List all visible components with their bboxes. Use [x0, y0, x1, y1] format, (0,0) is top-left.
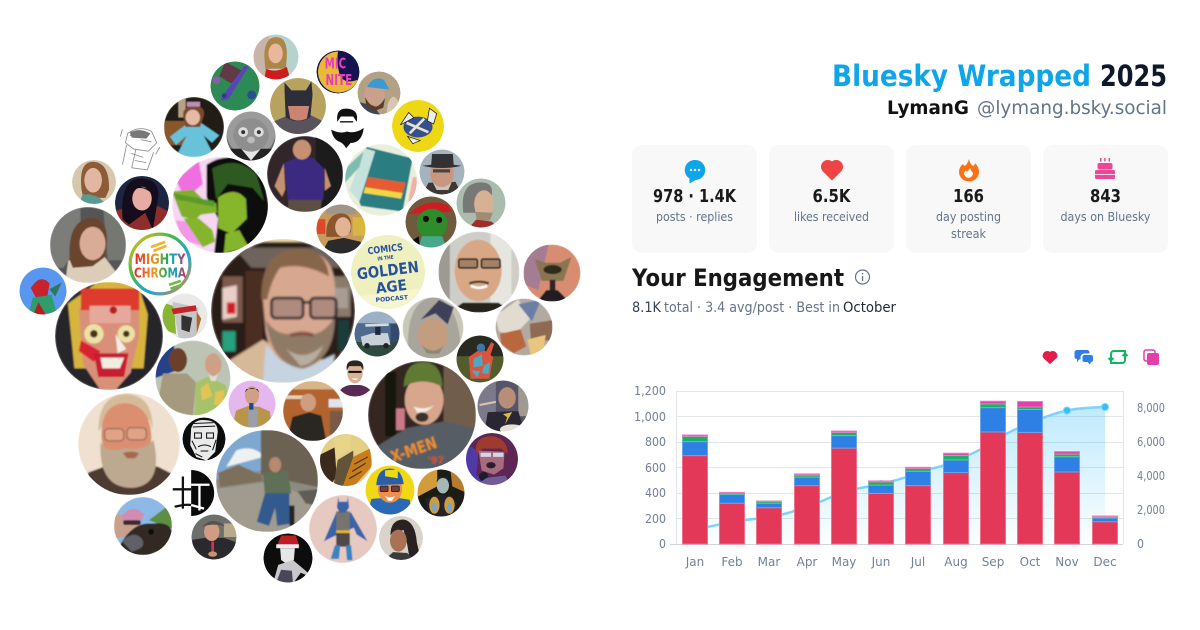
line markers	[878, 404, 1108, 488]
left axis labels: 200	[645, 512, 666, 526]
month labels: Sep	[982, 555, 1004, 569]
right axis labels	[1137, 401, 1165, 551]
avatar: Mighty Chroma logo: MIGHTY	[135, 252, 186, 268]
icon: heart	[822, 161, 842, 180]
quotes bars	[682, 401, 1118, 517]
avatar bubble cluster	[19, 34, 580, 582]
month labels: Jan	[685, 555, 704, 569]
avatar: pompeii street man	[216, 430, 318, 532]
chart gridlines	[670, 391, 1124, 544]
stat card: posts and replies	[632, 145, 757, 253]
user name and handle: @lymang.bsky.social	[977, 97, 1167, 119]
stacked bars	[682, 401, 1118, 544]
avatar: yellow comic panel	[320, 434, 372, 486]
avatar: man in purple shirt	[267, 136, 343, 212]
avatar: man in bookshop	[283, 381, 343, 441]
replies bars	[682, 408, 1118, 522]
month labels: Feb	[721, 555, 743, 569]
right axis labels: 0	[1137, 537, 1144, 551]
avatar: man in dark hat	[420, 150, 464, 194]
avatar: batman toy	[309, 495, 377, 563]
stat card: days on Bluesky: days on Bluesky	[1060, 210, 1150, 224]
reposts bars	[682, 404, 1118, 518]
title: Bluesky Wrapped	[832, 59, 1091, 93]
month labels: May	[832, 555, 856, 569]
avatar: teal book comic	[345, 144, 417, 216]
avatar: Mighty Chroma logo	[128, 232, 192, 296]
avatar: Comics in the Golden Age podcast logo: AGE	[375, 277, 408, 298]
stat card: day posting streak	[906, 145, 1031, 253]
icon: quotes legend	[1144, 350, 1159, 365]
avatar: man in x-men shirt: '97	[428, 456, 444, 467]
avatar: man in x-men shirt	[368, 361, 476, 469]
avatar: red figure on blue	[19, 268, 66, 314]
icon: cake	[1095, 158, 1115, 179]
avatar: Comics in the Golden Age podcast logo	[351, 235, 425, 309]
engagement summary: total · 3.4 avg/post · Best in	[664, 300, 840, 316]
month labels: Jul	[910, 555, 925, 569]
left axis labels: 600	[645, 461, 666, 475]
avatar: green toys	[210, 62, 260, 110]
avatar: HT logo	[170, 470, 216, 516]
left axis labels: 1,000	[634, 410, 666, 424]
month labels: Nov	[1055, 555, 1079, 569]
avatar: main profile photo	[211, 236, 355, 383]
month labels: Jun	[871, 555, 890, 569]
avatar: colorful costume figure	[456, 336, 504, 382]
avatar: man in fur hood	[402, 296, 464, 358]
avatar: bearded painted man	[456, 178, 506, 228]
avatar: microphone nite logo: NITE	[326, 72, 352, 89]
left axis labels: 0	[659, 537, 666, 551]
avatar: woman in black jacket	[316, 204, 366, 254]
avatar: masked comic face	[55, 282, 163, 390]
avatar: pencil sketch	[120, 128, 160, 170]
combo chart: monthly engagement	[634, 384, 1165, 569]
avatar: girl in blue dress	[164, 97, 224, 157]
icon: info	[856, 270, 870, 284]
stat card: day posting streak: day posting	[936, 210, 1001, 224]
avatar: microphone nite logo: MIC	[325, 56, 346, 73]
avatar: bearded man with glasses	[78, 393, 180, 495]
icon: reposts legend	[1108, 351, 1128, 363]
cumulative area	[695, 407, 1105, 544]
left axis labels	[634, 384, 666, 551]
engagement summary: 8.1K	[632, 300, 662, 316]
icon: replies legend	[1074, 350, 1093, 364]
chart legend	[1043, 350, 1159, 365]
user name and handle	[887, 97, 1167, 119]
avatar: woman in red top	[254, 34, 298, 80]
avatar: santa wolf	[264, 534, 312, 582]
cumulative line	[695, 407, 1105, 529]
avatar: pink backdrop man with microphone	[228, 380, 276, 428]
avatar: bald smiling man	[438, 232, 520, 312]
heading: your engagement: Your Engagement	[631, 264, 844, 292]
avatar: two men	[156, 340, 230, 416]
avatar: man with glasses in burgundy shirt	[340, 360, 370, 396]
left axis labels: 800	[645, 435, 666, 449]
avatar: Comics in the Golden Age podcast logo: COMICS	[367, 242, 404, 257]
icon: chat bubble	[685, 160, 705, 183]
stat card: likes received	[769, 145, 894, 253]
avatar: black and white ink face	[182, 418, 226, 460]
stat card: days on Bluesky	[1043, 145, 1168, 253]
engagement summary: October	[843, 300, 896, 316]
avatar: man in x-men shirt: X-MEN	[388, 433, 439, 466]
avatar: man in blue cap with dog	[358, 72, 400, 114]
avatar: microphone nite logo	[316, 50, 360, 94]
left axis labels: 400	[645, 486, 666, 500]
avatar: Comics in the Golden Age podcast logo: PODCAST	[375, 295, 408, 304]
avatar: golf cart	[354, 312, 400, 356]
left axis labels: 1,200	[634, 384, 666, 398]
avatar: green monster in red cap	[406, 196, 456, 248]
avatar: Comics in the Golden Age podcast logo: GOLDEN	[356, 258, 420, 283]
avatar: yellow turtle logo	[392, 100, 444, 152]
avatar: wolverine collage	[496, 298, 552, 356]
avatar: dark hair woman	[115, 176, 169, 230]
avatar: Mighty Chroma logo: CHROMA	[134, 266, 186, 282]
month labels: Aug	[944, 555, 968, 569]
avatar: batman drawing	[270, 78, 326, 134]
avatar: man in cap with drink	[192, 514, 236, 560]
avatar: man eating	[478, 380, 528, 435]
stat card: days on Bluesky: 843	[1090, 186, 1121, 207]
avatar: she-hulk comic	[172, 157, 269, 253]
month labels: Dec	[1093, 555, 1117, 569]
avatar: woman in fairy lights	[50, 207, 126, 283]
avatar: gold armor hero	[418, 470, 464, 516]
likes bars	[682, 432, 1118, 544]
avatar: bearded man sketch	[331, 108, 364, 148]
stat card: day posting streak: streak	[951, 227, 986, 241]
stat card: likes received: 6.5K	[812, 186, 851, 207]
user name and handle: LymanG	[887, 97, 969, 119]
avatar: hulk style comic	[162, 294, 208, 338]
icon: likes legend	[1043, 352, 1057, 364]
avatar: Comics in the Golden Age podcast logo: IN THE	[377, 255, 394, 263]
avatar: purple comic girl	[466, 433, 518, 485]
avatar: gray clay face	[226, 112, 276, 160]
stat card: posts and replies: posts · replies	[656, 210, 733, 224]
avatar: red hair woman	[72, 160, 116, 204]
avatar: woman with dark hair	[379, 516, 423, 560]
month labels: Mar	[758, 555, 780, 569]
title: 2025	[1100, 59, 1167, 93]
month labels: Oct	[1020, 555, 1041, 569]
avatar: pug with woman	[114, 497, 172, 555]
stat card: likes received: likes received	[794, 210, 869, 224]
stat card: posts and replies: 978 · 1.4K	[653, 186, 737, 207]
avatar: robot puppet	[524, 244, 580, 302]
right axis labels: 6,000	[1137, 435, 1165, 449]
icon: flame	[959, 159, 979, 182]
month labels: Apr	[797, 555, 817, 569]
month labels	[685, 555, 1117, 569]
right axis labels: 4,000	[1137, 469, 1165, 483]
right axis labels: 8,000	[1137, 401, 1165, 415]
avatar: blue comic man	[366, 466, 414, 514]
right axis labels: 2,000	[1137, 503, 1165, 517]
stat card: day posting streak: 166	[953, 186, 984, 207]
